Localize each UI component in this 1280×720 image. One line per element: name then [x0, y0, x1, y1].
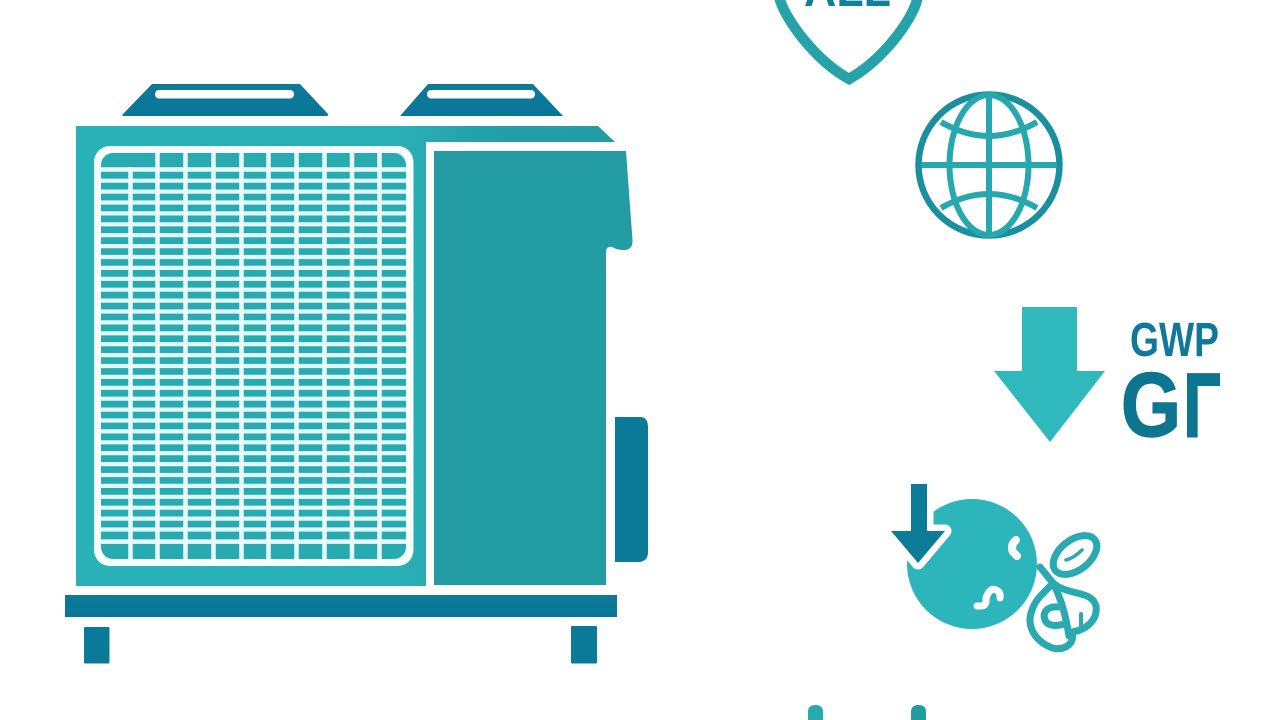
large gamma glyph: Γ [1184, 355, 1220, 455]
base rail [65, 595, 617, 617]
unit casing with top strip [76, 126, 615, 586]
icon: certification shield [778, 0, 919, 79]
down arrow with halo [891, 484, 945, 563]
side access panel [434, 151, 633, 585]
side handle [615, 417, 648, 562]
right top vent [400, 84, 563, 116]
partial icon: left prong at bottom edge [808, 705, 823, 720]
icon: low-carbon globe with arrow and leaves [891, 484, 1104, 649]
right foot [571, 626, 597, 664]
icon: globe [918, 94, 1060, 236]
leaves and stem [1030, 528, 1104, 649]
left top vent [122, 84, 328, 116]
planet [907, 499, 1037, 629]
large G glyph: G [1121, 355, 1181, 456]
icon: down arrow for reduced GWP [994, 307, 1105, 442]
GWP label [1121, 314, 1220, 456]
partial icon: right prong at bottom edge [911, 705, 926, 720]
left foot [84, 627, 110, 664]
condenser grille [94, 146, 414, 566]
planet continents [977, 540, 1017, 606]
GWP text: GWP [1130, 314, 1219, 367]
air conditioning outdoor unit [65, 84, 648, 664]
